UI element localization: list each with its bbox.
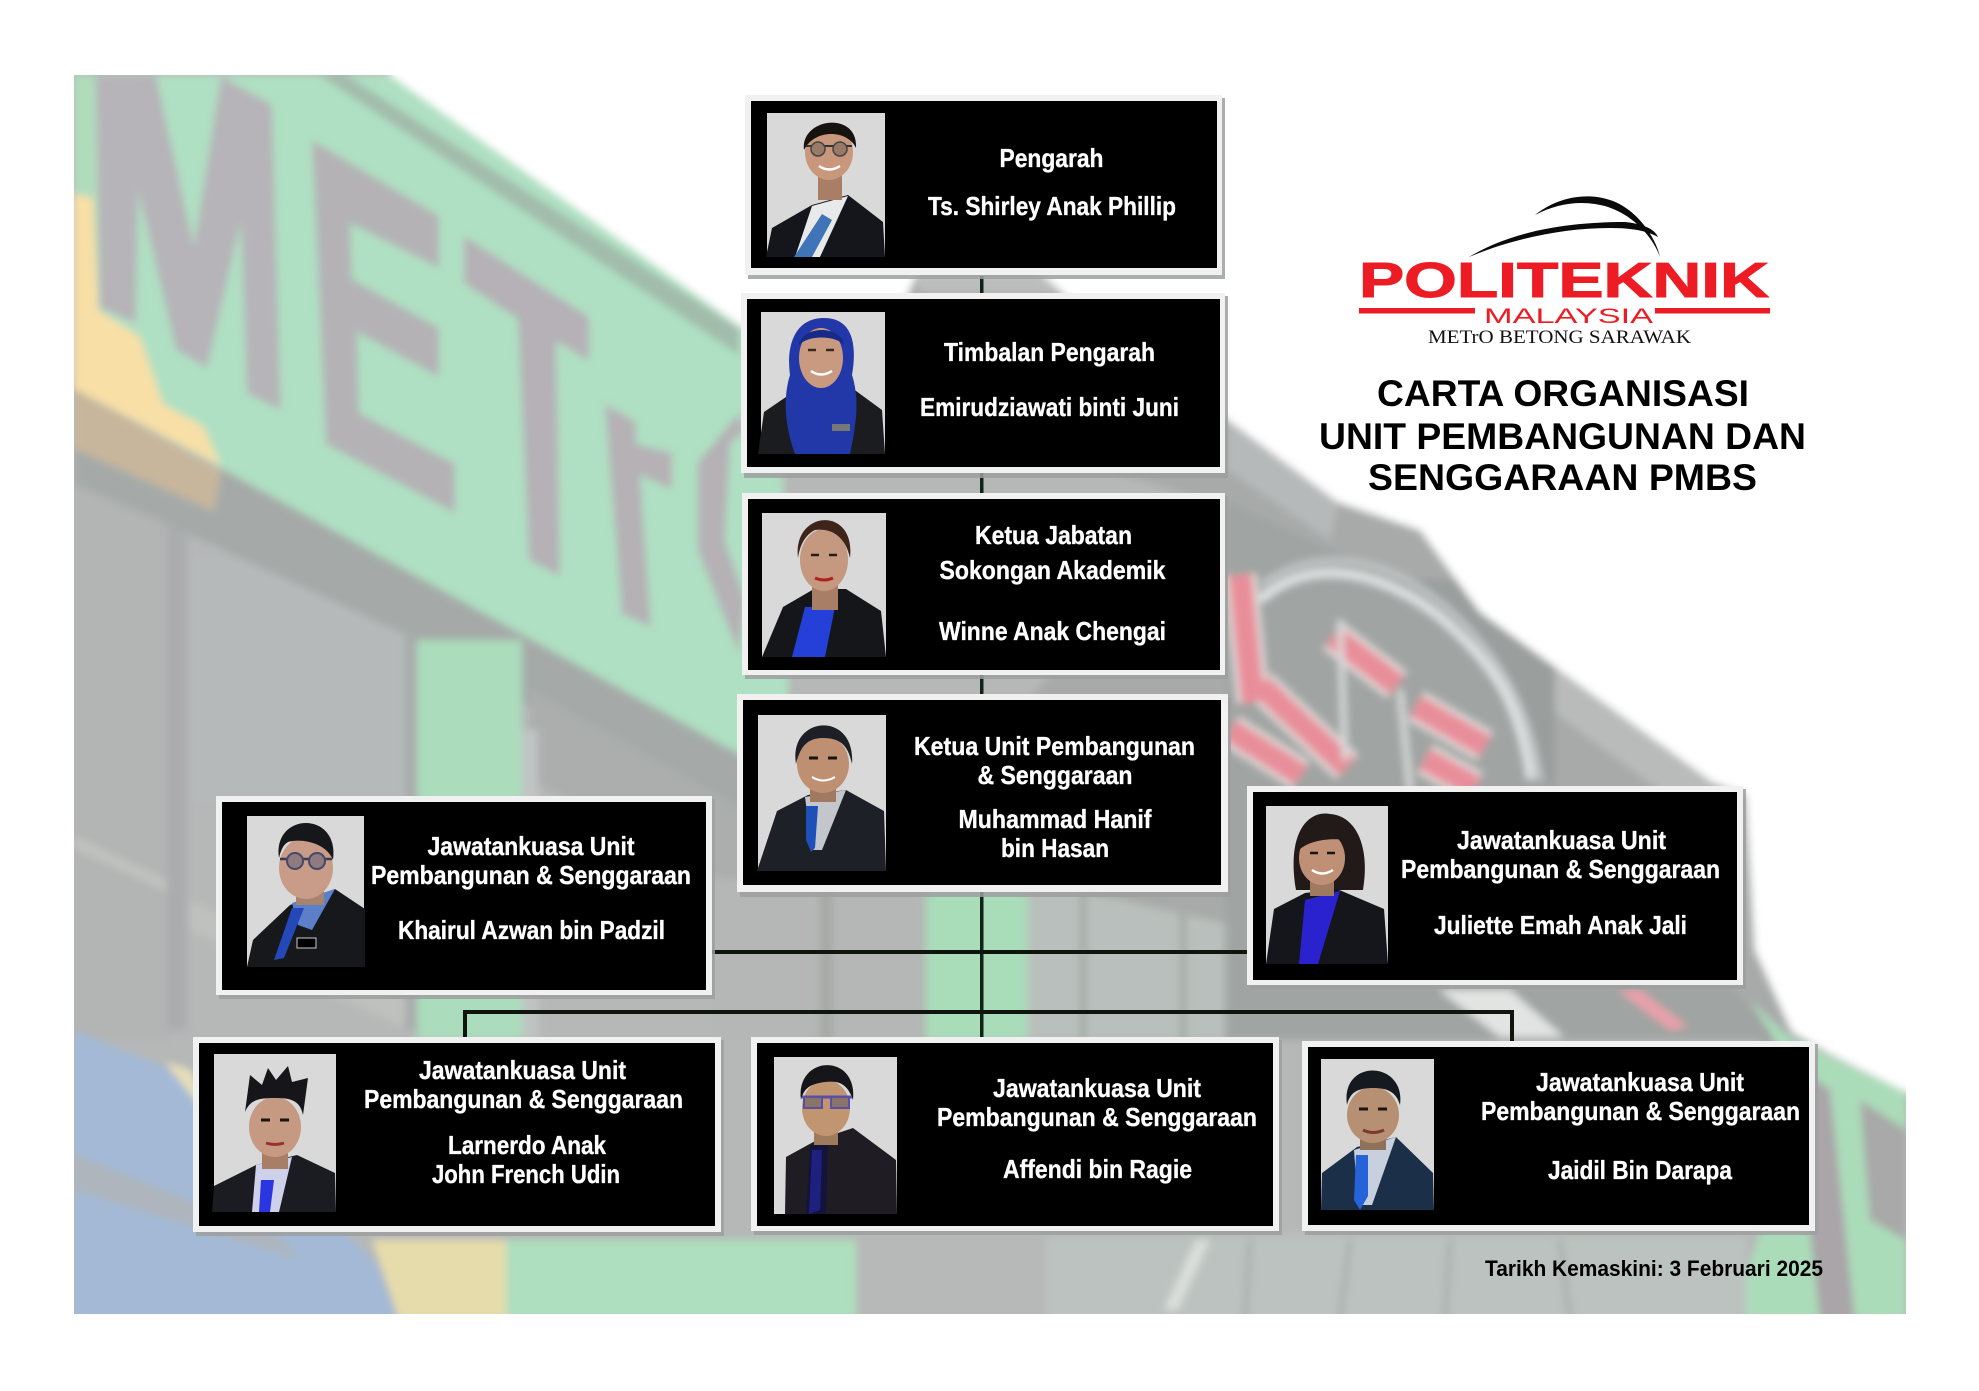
text: Ketua Jabatan: Winne Anak Chengai (939, 616, 1166, 646)
panel: Juliette Emah (1247, 786, 1746, 989)
text: Pengarah: Pengarah (1000, 143, 1104, 173)
title: UNIT PEMBANGUNAN DAN (1319, 416, 1806, 457)
portrait: Jaidil (1321, 1059, 1434, 1210)
logo: Politeknik Malaysia: METrO BETONG SARAWAK (1428, 327, 1691, 348)
text: Juliette Emah: Jawatankuasa Unit (1457, 825, 1666, 855)
text: Ketua Unit: Muhammad Hanif (958, 804, 1152, 834)
portrait: Emirudziawati (758, 312, 885, 454)
portrait: Winne (762, 513, 886, 657)
panel: Ketua Unit (737, 694, 1231, 897)
text: Larnerdo (364, 1055, 683, 1189)
portrait: Larnerdo (212, 1054, 336, 1212)
text: Larnerdo: Jawatankuasa Unit (419, 1055, 626, 1085)
portrait: Affendi (774, 1057, 897, 1214)
text: Juliette Emah (1401, 825, 1720, 940)
text: Ketua Jabatan (939, 520, 1166, 646)
text: Ketua Unit: Ketua Unit Pembangunan (914, 731, 1195, 761)
text: Affendi: Jawatankuasa Unit (993, 1073, 1201, 1103)
panel: Ketua Jabatan (742, 493, 1228, 679)
title: CARTA ORGANISASI (1377, 373, 1749, 414)
logo stripes on the building (1230, 575, 1485, 787)
connector lines (463, 276, 1514, 1042)
text: Affendi: Pembangunan & Senggaraan (937, 1102, 1257, 1132)
sign band (73, 75, 790, 760)
text: Pengarah (928, 143, 1176, 221)
panel: Affendi (751, 1037, 1282, 1235)
title (1319, 373, 1806, 498)
text: Jaidil (1481, 1067, 1800, 1185)
portrait: Muhammad Hanif (757, 715, 886, 871)
text: Larnerdo: John French Udin (432, 1159, 620, 1189)
text: Ketua Unit (914, 731, 1195, 863)
text: Larnerdo: Larnerdo Anak (448, 1130, 606, 1160)
text: Ketua Jabatan: Sokongan Akademik (940, 555, 1166, 585)
sky cut-out (390, 40, 1979, 1092)
text: Khairul Azwan (371, 831, 691, 945)
panel: Khairul Azwan (216, 796, 715, 999)
logo: Politeknik Malaysia (1359, 196, 1770, 348)
text: Jaidil: Pembangunan & Senggaraan (1481, 1096, 1800, 1126)
text: Ketua Unit: & Senggaraan (978, 760, 1132, 790)
text: Juliette Emah: Juliette Emah Anak Jali (1434, 910, 1687, 940)
text: Affendi: Affendi bin Ragie (1003, 1154, 1192, 1184)
logo: Politeknik Malaysia: POLITEKNIK (1359, 254, 1769, 308)
portrait: Shirley (766, 113, 885, 257)
text: Khairul Azwan: Jawatankuasa Unit (428, 831, 635, 861)
text: Ketua Jabatan: Ketua Jabatan (975, 520, 1132, 550)
panel: Jaidil (1302, 1041, 1818, 1235)
upper building behind the sign (911, 288, 1789, 1041)
panel: Timbalan Pengarah (741, 293, 1228, 478)
text: Pengarah: Ts. Shirley Anak Phillip (928, 191, 1176, 221)
logo: Politeknik Malaysia: MALAYSIA (1484, 305, 1653, 328)
portrait: Khairul (247, 816, 365, 967)
update date note: Tarikh Kemaskini: 3 Februari 2025 (1485, 1256, 1823, 1281)
panel: Pengarah (745, 95, 1225, 279)
text: Timbalan Pengarah: Timbalan Pengarah (944, 337, 1155, 367)
text: Timbalan Pengarah: Emirudziawati binti Juni (920, 392, 1179, 422)
text: Larnerdo: Pembangunan & Senggaraan (364, 1084, 683, 1114)
text: Khairul Azwan: Khairul Azwan bin Padzil (398, 915, 665, 945)
text: Khairul Azwan: Pembangunan & Senggaraan (371, 860, 691, 890)
title: SENGGARAAN PMBS (1368, 457, 1757, 498)
text: Jaidil: Jaidil Bin Darapa (1548, 1155, 1732, 1185)
portrait: Juliette (1266, 806, 1388, 964)
lower facade (73, 1030, 399, 1320)
text: Jaidil: Jawatankuasa Unit (1536, 1067, 1744, 1097)
text: Timbalan Pengarah (920, 337, 1179, 422)
text: Ketua Unit: bin Hasan (1001, 833, 1109, 863)
text: Affendi (937, 1073, 1257, 1184)
text: Juliette Emah: Pembangunan & Senggaraan (1401, 854, 1720, 884)
panel: Larnerdo (193, 1037, 724, 1236)
